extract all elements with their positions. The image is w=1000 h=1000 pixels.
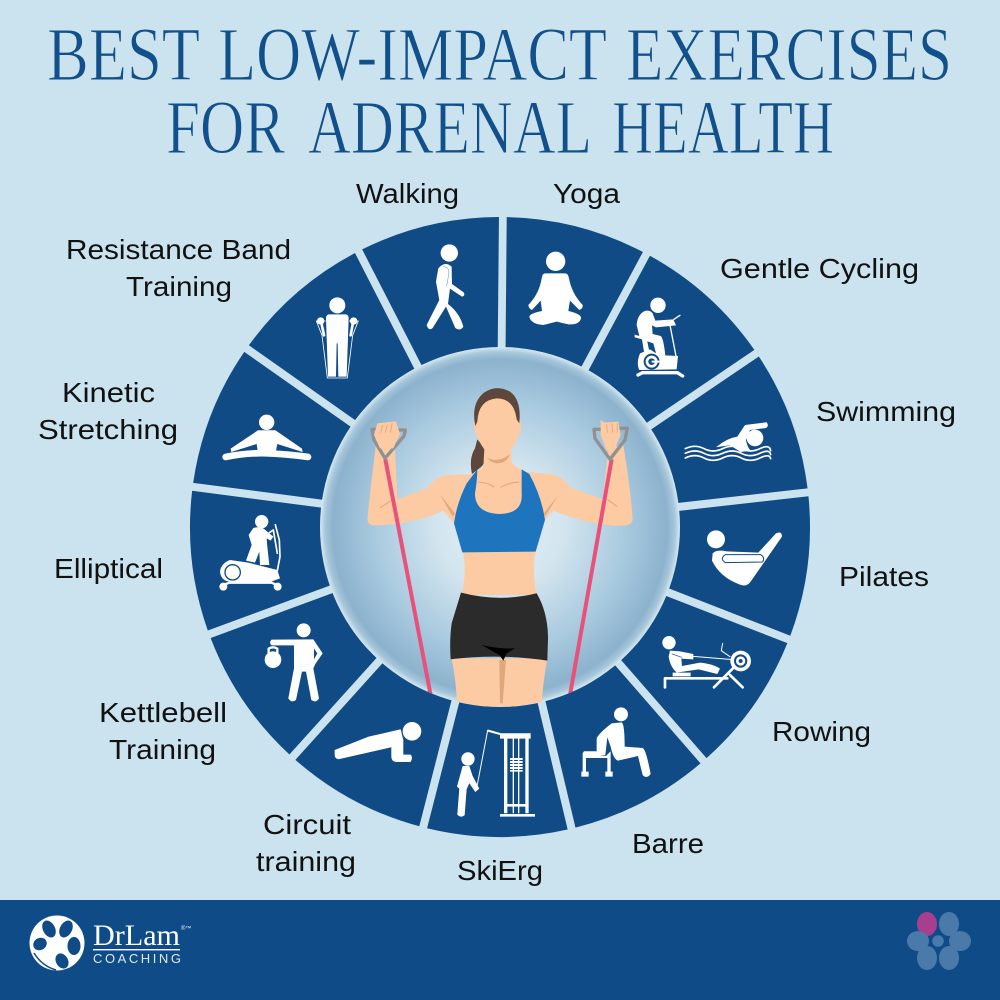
- icon: pilates v-sit: [707, 530, 782, 586]
- title: HEALTH: [612, 86, 834, 170]
- label: Rowing: Rowing: [772, 716, 871, 747]
- icon: plank: [335, 722, 421, 762]
- logo mark: [30, 916, 84, 971]
- orb background: [320, 347, 680, 707]
- label: Circuit training: Circuit: [263, 809, 351, 840]
- icon: swimmer: [685, 422, 771, 460]
- title: [47, 13, 952, 170]
- icon: yoga: [528, 252, 583, 325]
- title: ADRENAL: [308, 86, 592, 170]
- footer bar: [0, 900, 1000, 1000]
- label: Resistance Band Training: Resistance Band: [66, 234, 291, 265]
- panel: Barre segment: [513, 643, 704, 835]
- logo: Dr Lam Coaching: COACHING: [93, 951, 181, 966]
- icon: rowing machine: [662, 636, 751, 687]
- logo wordmark: DrLam: [93, 919, 180, 952]
- panel: SkiErg segment: [427, 692, 569, 838]
- label: Kettlebell Training: Training: [109, 734, 216, 765]
- panel: Walking segment: [360, 209, 530, 382]
- title: FOR: [166, 86, 285, 170]
- sports bra: [454, 469, 545, 552]
- panel: Pilates segment: [656, 479, 816, 637]
- torso and arms: [367, 437, 633, 595]
- logo: flower mark: [907, 912, 971, 970]
- label: Resistance Band Training: [66, 234, 291, 302]
- logo: Dr Lam Coaching: ®™: [181, 925, 191, 932]
- icon: kettlebell: [265, 623, 323, 701]
- panel: Elliptical segment: [184, 476, 343, 631]
- title: LOW-IMPACT: [218, 13, 607, 97]
- ponytail: [471, 439, 486, 474]
- legs: [452, 658, 547, 707]
- panel: Resistance Band Training segment: [244, 247, 444, 448]
- panel: Kinetic Stretching segment: [186, 349, 371, 532]
- logo: Dr Lam Coaching: [30, 916, 191, 971]
- hair: [474, 388, 520, 426]
- label: Barre: Barre: [632, 828, 704, 859]
- label: Kinetic Stretching: [38, 377, 178, 445]
- icon: person with resistance band: [316, 297, 358, 378]
- panel: Rowing segment: [595, 565, 794, 763]
- label: SkiErg: SkiErg: [457, 855, 543, 886]
- handles: [372, 428, 627, 459]
- panel: Swimming segment: [631, 354, 815, 535]
- label: Gentle Cycling: Gentle Cycling: [720, 253, 919, 284]
- icon: elliptical machine: [219, 515, 282, 591]
- neck shadow: [487, 454, 510, 463]
- label: Kinetic Stretching: Stretching: [38, 414, 178, 445]
- label: Kinetic Stretching: Kinetic: [62, 377, 155, 408]
- label: Circuit training: [256, 809, 356, 877]
- bands: [385, 459, 612, 695]
- head: [474, 398, 521, 450]
- label: Resistance Band Training: Training: [126, 271, 232, 302]
- woman with resistance bands: [367, 388, 633, 707]
- label: Pilates: Pilates: [839, 561, 929, 592]
- central figure: orb with woman: [320, 347, 680, 707]
- label: Kettlebell Training: [99, 697, 227, 765]
- panel: Yoga segment: [473, 209, 645, 384]
- label: Circuit training: training: [256, 846, 356, 877]
- icon: seated stretch: [226, 415, 308, 457]
- label: Swimming: Swimming: [816, 396, 956, 427]
- label: Elliptical: Elliptical: [54, 553, 163, 584]
- hands: [374, 420, 621, 451]
- icon: stationary bike: [635, 298, 683, 376]
- title: BEST: [47, 13, 200, 97]
- label: Kettlebell Training: Kettlebell: [99, 697, 227, 728]
- icon: barre squat: [581, 707, 651, 777]
- icon: walking person: [427, 244, 464, 330]
- label: Walking: Walking: [356, 178, 459, 209]
- shorts: [450, 593, 548, 661]
- panel: Circuit training segment: [292, 640, 484, 833]
- panel: Kettlebell Training segment: [204, 562, 402, 759]
- icon: cable machine with person: [457, 731, 535, 817]
- label: Yoga: Yoga: [553, 178, 620, 209]
- collarbone and arm folds: [380, 482, 617, 508]
- panel: Gentle Cycling segment: [559, 250, 760, 451]
